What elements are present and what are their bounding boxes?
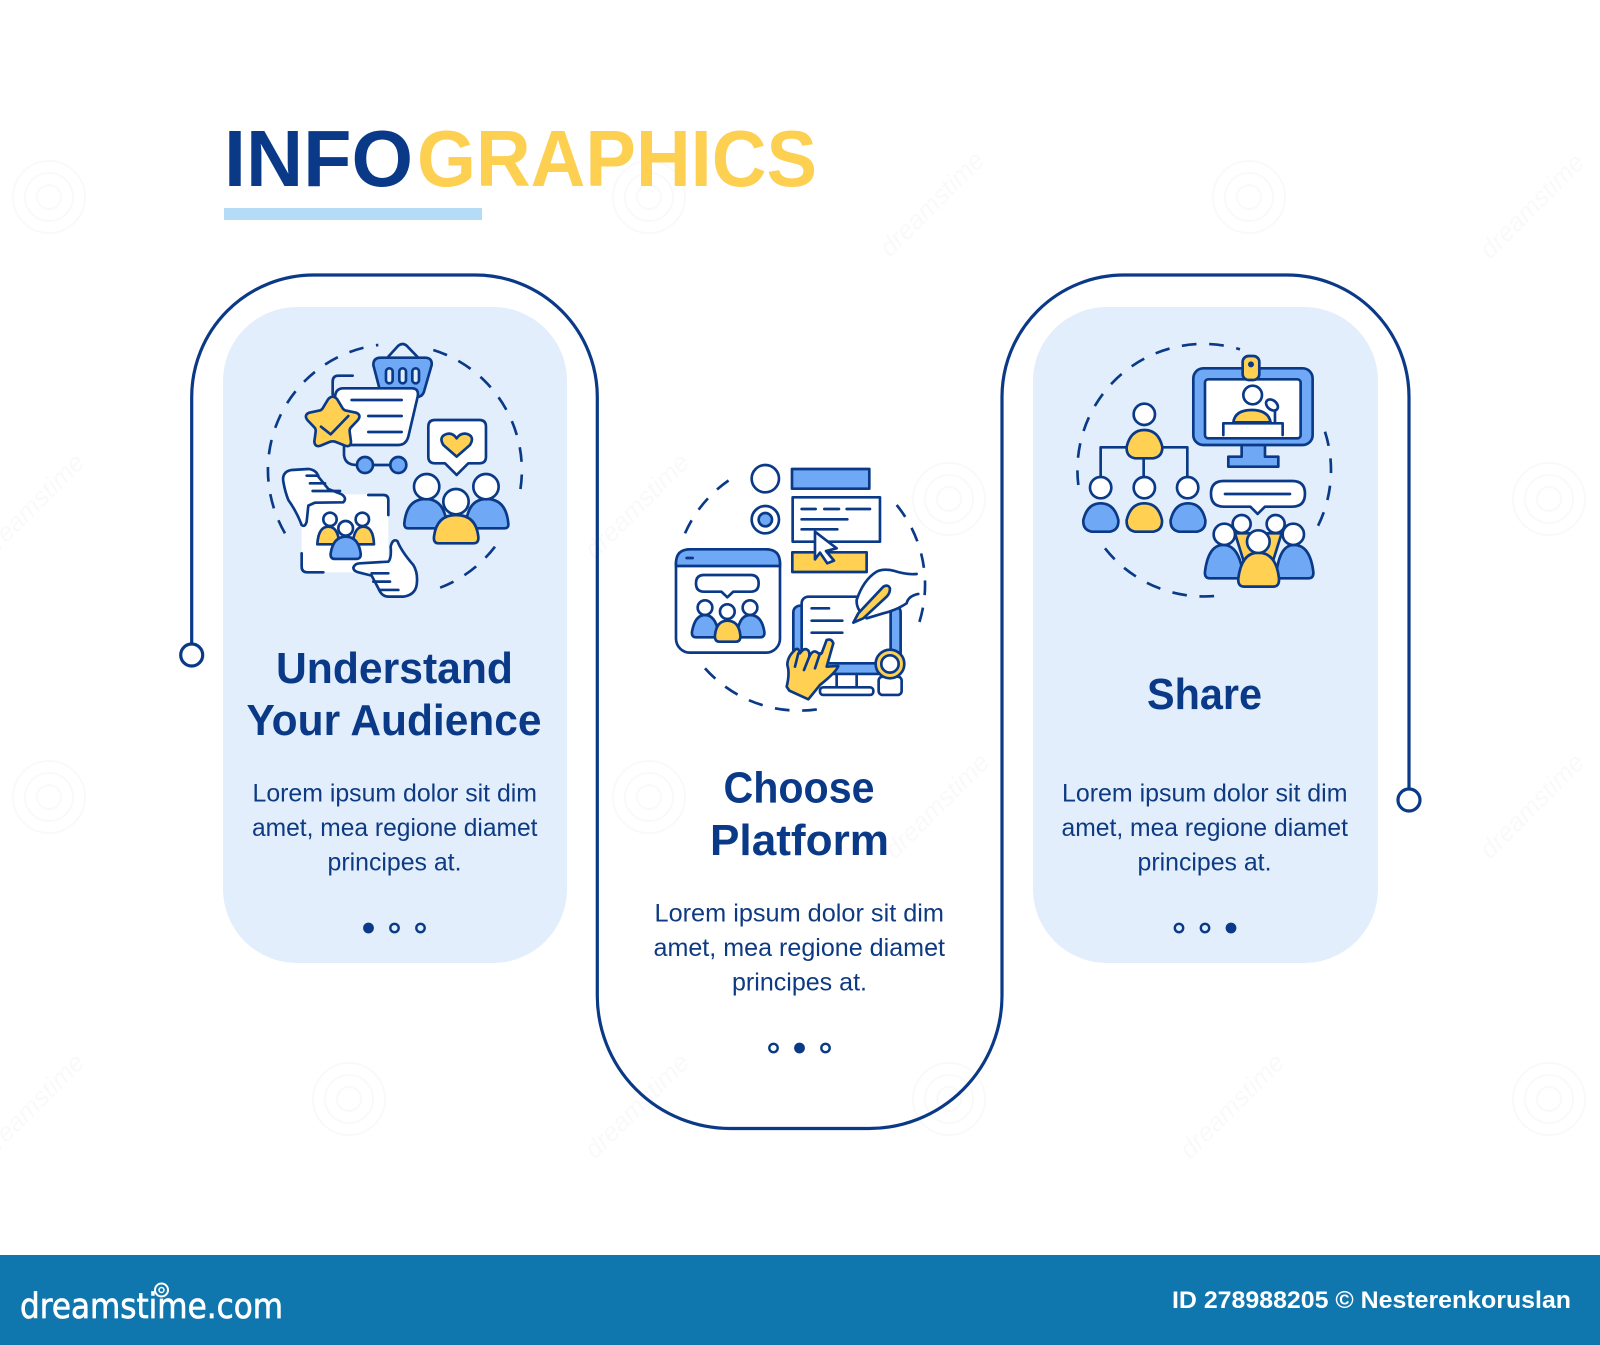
panel: left card background xyxy=(223,307,567,963)
background watermark: dreamstime xyxy=(1473,747,1590,864)
heading: Your Audience xyxy=(246,696,542,745)
text block: Lorem ipsum dolor sit dim xyxy=(252,780,537,808)
heading xyxy=(246,644,542,745)
panel: choose platform xyxy=(654,465,945,1052)
title: INFO xyxy=(224,114,413,203)
title underline xyxy=(224,208,482,220)
heading: Platform xyxy=(710,816,889,865)
panel: understand your audience xyxy=(246,344,542,932)
text block: Lorem ipsum dolor sit dim xyxy=(654,900,944,928)
background watermark xyxy=(0,145,1590,1164)
background watermark: dreamstime xyxy=(578,447,695,564)
icon: audience research xyxy=(268,344,522,597)
footer credit: ID 278988205 © Nesterenkoruslan xyxy=(1172,1287,1571,1314)
title: GRAPHICS xyxy=(417,114,817,203)
heading: Choose xyxy=(724,764,874,812)
icon: online presentation xyxy=(1077,344,1331,596)
connecting outline xyxy=(181,275,1420,1128)
panel: share xyxy=(1062,344,1348,932)
footer bar xyxy=(0,1255,1600,1345)
text block: Lorem ipsum dolor sit dim xyxy=(1062,780,1348,808)
background watermark: dreamstime xyxy=(1173,1047,1290,1164)
background watermark: dreamstime xyxy=(578,1047,695,1164)
text block: amet, mea regione diamet xyxy=(654,934,945,962)
background watermark: dreamstime xyxy=(878,747,995,864)
background watermark: dreamstime xyxy=(873,145,990,262)
text block: amet, mea regione diamet xyxy=(1062,814,1348,842)
heading: Understand xyxy=(276,644,513,693)
text block: principes at. xyxy=(328,848,462,876)
icon: platform selection xyxy=(676,465,925,711)
heading: Share xyxy=(1147,670,1262,719)
text block: amet, mea regione diamet xyxy=(252,814,538,842)
heading xyxy=(710,764,889,865)
text block xyxy=(654,900,945,996)
text block xyxy=(252,780,538,876)
pager dots xyxy=(364,924,425,932)
text block: principes at. xyxy=(732,968,867,996)
title xyxy=(224,114,817,203)
text block xyxy=(1062,780,1348,876)
background watermark: dreamstime xyxy=(1473,147,1590,264)
panel: right card background xyxy=(1033,307,1378,963)
text block: principes at. xyxy=(1138,848,1272,876)
pager dots xyxy=(1175,924,1235,932)
footer logo: dreamstime.com xyxy=(20,1287,283,1327)
pager dots xyxy=(769,1044,830,1052)
